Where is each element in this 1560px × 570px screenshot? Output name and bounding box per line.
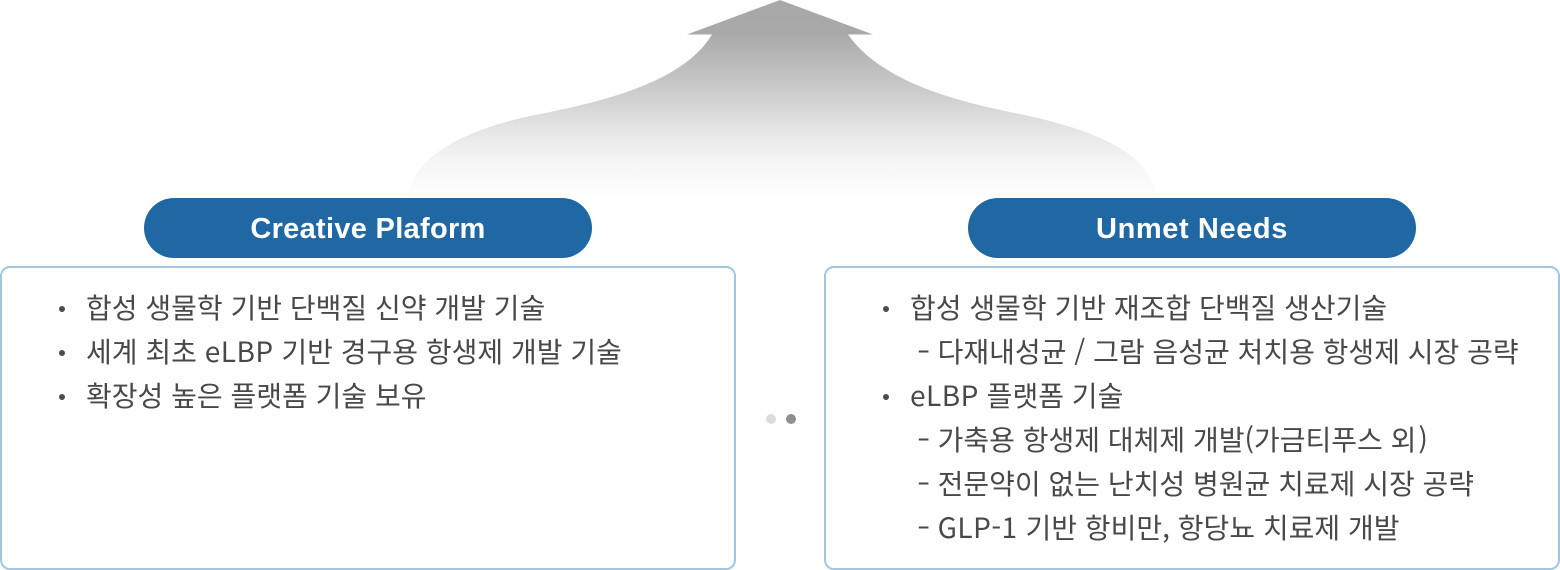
panel: Unmet Needs [824,266,1560,570]
sub-item: livestock antibiotics: 가축용 항생제 대체제 개발(가금티푸스 외) [938,419,1428,459]
heading: Unmet Needs: Unmet Needs [1096,213,1288,245]
bullet text: synthetic biology: 합성 생물학 기반 재조합 단백질 생산기술 [910,287,1387,327]
bullet text 1: 합성 생물학 기반 단백질 신약 개발 기술 [86,287,545,327]
sub-item: MDR market: 다재내성균 / 그람 음성균 처치용 항생제 시장 공략 [938,331,1519,371]
sub-item: GLP-1: - [917,507,930,547]
heading: Creative Plaform [144,198,592,258]
bullet text 3: 확장성 높은 플랫폼 기술 보유 [86,375,426,415]
sub-item: livestock antibiotics: - [917,419,930,459]
sub-item: GLP-1: GLP-1 기반 항비만, 항당뇨 치료제 개발 [938,507,1400,547]
icon: upward gradient arrow [424,0,1142,166]
icon: dark dot [786,414,796,424]
heading: Unmet Needs [968,198,1416,258]
sub-item: MDR market: - [917,331,930,371]
heading: Creative Plaform: Creative Plaform [250,213,486,245]
sub-item: hospital pathogens: - [917,463,930,503]
icon: light dot [766,414,776,424]
bullet text 2: 세계 최초 eLBP 기반 경구용 항생제 개발 기술 [86,331,622,371]
panel: Creative Platform [0,266,736,570]
bullet text: eLBP platform: eLBP 플랫폼 기술 [910,375,1123,415]
sub-item: hospital pathogens: 전문약이 없는 난치성 병원균 치료제 시장 공략 [938,463,1474,503]
